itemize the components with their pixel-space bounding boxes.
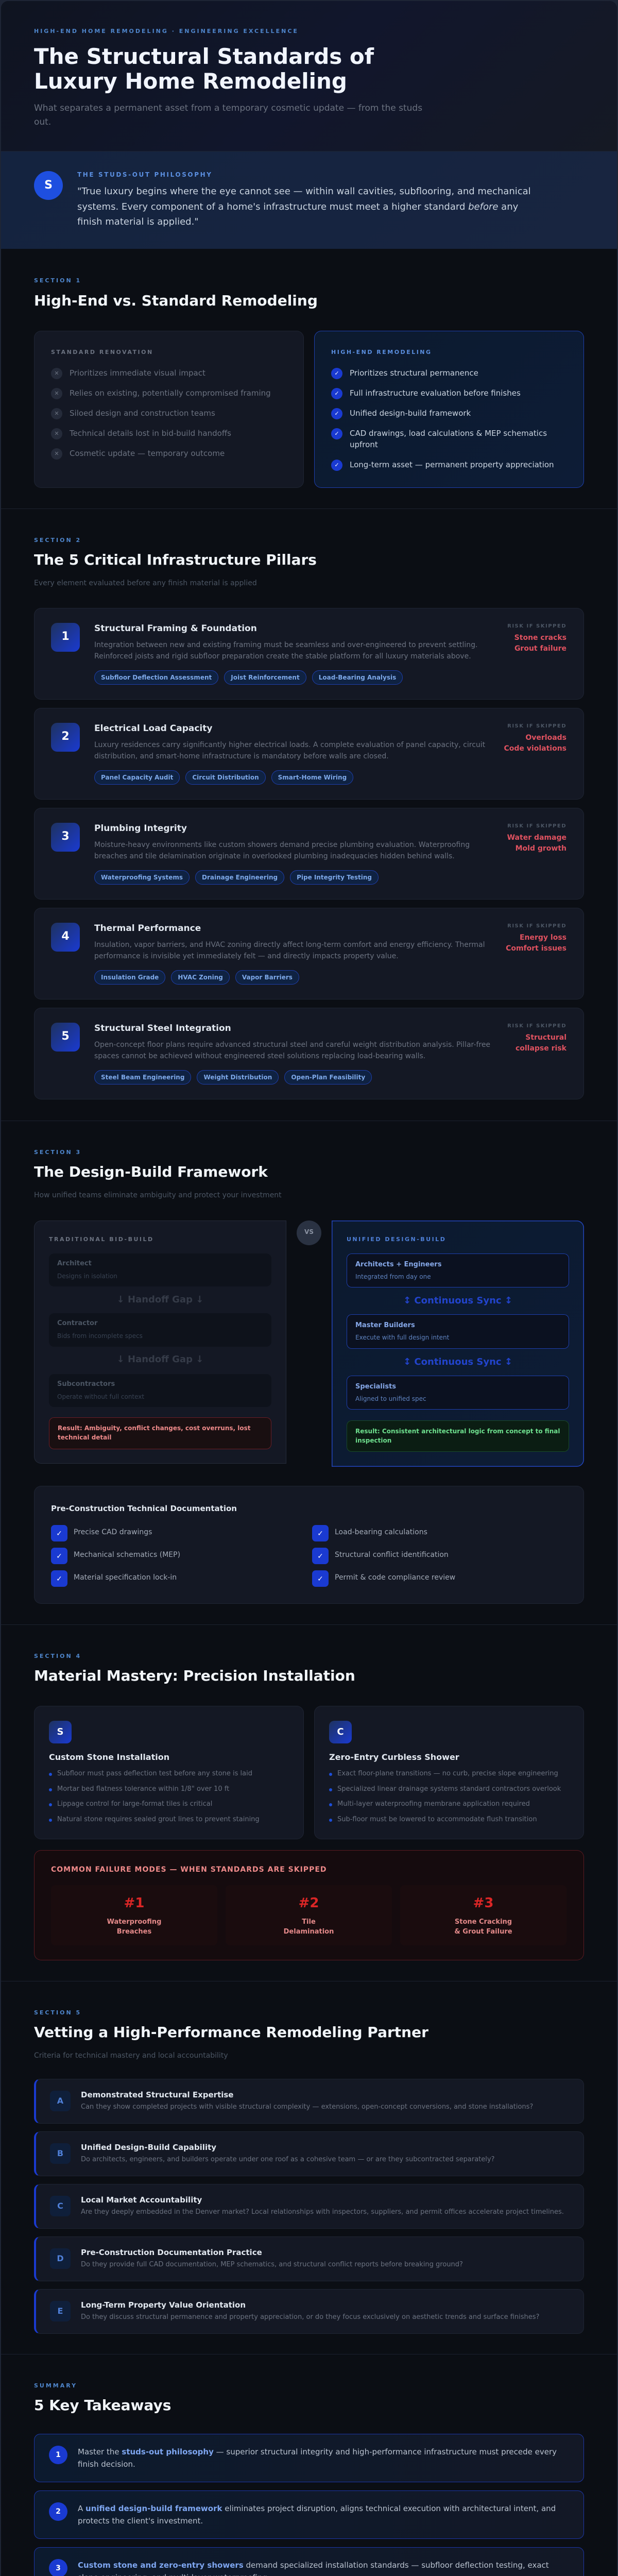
tags: Subfloor Deflection Assessment	[101, 674, 212, 681]
item: ✓	[56, 1530, 62, 1538]
section: summary takeaways	[1, 2354, 617, 2576]
risk values: Stone cracks	[514, 634, 566, 642]
tags: Load-Bearing Analysis	[319, 674, 396, 681]
pillar title: Plumbing Integrity	[94, 823, 187, 834]
badge: vs: VS	[304, 1228, 314, 1235]
letter badge	[50, 2091, 71, 2111]
risk values: Water damage	[507, 834, 566, 842]
tags	[94, 670, 403, 685]
criterion title: Long-Term Property Value Orientation	[81, 2300, 246, 2309]
panel: pre-construction documentation	[34, 1486, 584, 1604]
pillar description: spaces cannot be achieved without engineered steel solutions replacing load-bearing walls.	[94, 1052, 425, 1060]
step: specialists	[347, 1376, 569, 1410]
item: ✕	[54, 430, 59, 437]
tags: Panel Capacity Audit	[101, 774, 173, 781]
number	[49, 2502, 67, 2521]
hero title: The Structural Standards of	[34, 44, 374, 69]
risk values	[504, 734, 566, 752]
bullet text: Natural stone requires sealed grout lines to prevent staining	[57, 1816, 260, 1823]
bullet	[329, 1803, 332, 1806]
letter badge: A	[57, 2096, 63, 2105]
criterion question: Do they discuss structural permanence and property appreciation, or do they focus exclusively on aesthetic trends and surface finishes?	[81, 2313, 539, 2320]
panel heading: HIGH-END REMODELING	[331, 348, 432, 355]
takeaway 2	[34, 2490, 584, 2539]
panel heading: COMMON FAILURE MODES — WHEN STANDARDS ARE SKIPPED	[51, 1866, 327, 1874]
tags: Open-Plan Feasibility	[291, 1074, 365, 1081]
item: ✓	[334, 430, 339, 437]
step title: Master Builders	[355, 1321, 415, 1329]
result: success: Result: Consistent architectural logic from concept to final inspection	[355, 1428, 560, 1444]
takeaway text	[78, 2445, 557, 2470]
item: Full infrastructure evaluation before finishes	[350, 388, 521, 398]
risk values: Comfort issues	[506, 944, 566, 952]
callout quote: systems. Every component of a home's infrastructure must meet a higher standard before any	[77, 201, 518, 212]
item: ✓	[56, 1552, 62, 1561]
arrow: continuous sync: ↕ Continuous Sync ↕	[403, 1295, 512, 1306]
item	[331, 428, 547, 449]
pillar description: breaches and tile delamination originate in overlooked plumbing inadequacies hidden behind walls.	[94, 852, 455, 860]
step: contractor	[49, 1313, 271, 1347]
bullet text: Mortar bed flatness tolerance within 1/8" over 10 ft	[57, 1785, 229, 1793]
item: Load-bearing calculations	[335, 1528, 427, 1536]
item: upfront	[350, 440, 378, 449]
pillar description: Insulation, vapor barriers, and HVAC zoning directly affect long-term comfort and energy efficiency. Thermal	[94, 941, 485, 949]
number badge: 3	[61, 830, 70, 843]
step title: Architect	[57, 1260, 92, 1267]
list: standard items	[51, 368, 271, 460]
letter badge: C	[57, 2201, 63, 2210]
bullet	[49, 1819, 52, 1822]
icon: S circle	[34, 171, 63, 200]
panel: traditional bid-build	[34, 1221, 286, 1464]
tags: Smart-Home Wiring	[278, 774, 347, 781]
section heading: 5 Key Takeaways	[34, 2397, 171, 2414]
section label: SECTION 1	[34, 277, 81, 283]
step note: Aligned to unified spec	[355, 1395, 426, 1402]
bullet	[329, 1773, 332, 1776]
pillar description: performance is invisible yet immediately felt — and directly impacts property value.	[94, 952, 399, 960]
result: failure: Result: Ambiguity, conflict changes, cost overruns, lost technical detail	[58, 1425, 250, 1441]
risk values: collapse risk	[516, 1044, 566, 1052]
item: ✕	[54, 390, 59, 397]
panel: high-end remodeling	[314, 331, 584, 488]
tags: Weight Distribution	[203, 1074, 272, 1081]
failure label: Breaches	[117, 1928, 151, 1936]
callout quote: "True luxury begins where the eye cannot see — within wall cavities, subflooring, and mechanical	[77, 186, 531, 197]
hero eyebrow: HIGH-END HOME REMODELING · ENGINEERING EXCELLENCE	[34, 28, 299, 35]
pillar description	[94, 641, 478, 660]
failure label: Tile	[302, 1918, 316, 1926]
number badge	[51, 823, 80, 852]
takeaway text: Master the studs-out philosophy — superior structural integrity and high-performance infrastructure must precede every	[78, 2447, 557, 2456]
panel: zero-entry curbless shower	[314, 1706, 584, 1839]
panel: common failure modes	[34, 1850, 584, 1960]
letter badge: D	[57, 2253, 64, 2263]
section label: SECTION 2	[34, 537, 81, 543]
risk label: RISK IF SKIPPED	[507, 823, 566, 829]
step: architect	[49, 1253, 271, 1286]
risk values	[506, 934, 566, 952]
number: 3	[56, 2564, 61, 2572]
tags	[94, 870, 379, 885]
callout quote: finish material is applied."	[77, 216, 199, 227]
item: ✕	[54, 370, 59, 377]
takeaway text: finish decision.	[78, 2460, 135, 2469]
bullet text: Exact floor-plane transitions — no curb, precise slope engineering	[337, 1770, 558, 1777]
number: 1	[56, 2451, 61, 2459]
section label: SECTION 5	[34, 2009, 81, 2015]
item: Siloed design and construction teams	[70, 408, 215, 417]
section label: SUMMARY	[34, 2382, 77, 2388]
number	[49, 2559, 67, 2576]
takeaway 1	[34, 2434, 584, 2482]
letter badge: E	[58, 2306, 63, 2315]
item: ✕	[54, 410, 59, 417]
pillar 2	[34, 708, 584, 800]
rank: #2	[299, 1895, 319, 1911]
pillar title: Structural Framing & Foundation	[94, 623, 257, 634]
pillar 1	[34, 608, 584, 700]
pillar description	[94, 841, 470, 860]
hero subtitle: What separates a permanent asset from a temporary cosmetic update — from the studs	[34, 103, 422, 113]
callout: studs-out philosophy	[1, 151, 617, 249]
panel: standard renovation	[34, 331, 304, 488]
callout quote	[77, 186, 531, 227]
failure label: Stone Cracking	[455, 1918, 512, 1926]
arrow: handoff gap: ↓ Handoff Gap ↓	[117, 1294, 203, 1305]
risk values	[516, 1033, 566, 1052]
panel: unified design-build	[332, 1221, 584, 1467]
arrow: continuous sync: ↕ Continuous Sync ↕	[403, 1357, 512, 1367]
pillar 3	[34, 808, 584, 900]
pillar 5	[34, 1008, 584, 1099]
panel title: Zero-Entry Curbless Shower	[329, 1752, 459, 1762]
step title: Specialists	[355, 1383, 396, 1391]
tags: Joist Reinforcement	[231, 674, 300, 681]
result: failure	[49, 1417, 271, 1449]
section heading: The Design-Build Framework	[34, 1163, 268, 1180]
pillar description: distribution, and smart-home infrastructure is mandatory before walls are closed.	[94, 752, 389, 760]
icon badge	[49, 1721, 72, 1743]
item: ✓	[334, 390, 339, 397]
step: master builders	[347, 1314, 569, 1349]
risk label: RISK IF SKIPPED	[507, 1023, 566, 1029]
step note: Designs in isolation	[57, 1273, 117, 1280]
failure label: Waterproofing	[107, 1918, 161, 1926]
section label: SECTION 3	[34, 1149, 81, 1155]
pillar description	[94, 741, 485, 760]
section 3: design-build framework	[1, 1121, 617, 1624]
item: Precise CAD drawings	[74, 1528, 152, 1536]
criterion question: Are they deeply embedded in the Denver market? Local relationships with inspectors, suppliers, and permit offices accelerate project timelines.	[81, 2208, 564, 2215]
item: ✓	[317, 1530, 323, 1538]
risk values: Overloads	[525, 734, 566, 742]
section subheading: Every element evaluated before any finish material is applied	[34, 579, 257, 587]
risk label: RISK IF SKIPPED	[507, 723, 566, 729]
criterion D	[34, 2236, 584, 2281]
bullet	[49, 1803, 52, 1806]
tags	[94, 1070, 372, 1084]
criterion title: Pre-Construction Documentation Practice	[81, 2247, 262, 2257]
pillar description: Moisture-heavy environments like custom showers demand precise plumbing evaluation. Waterproofing	[94, 841, 470, 849]
icon badge: S	[57, 1726, 63, 1737]
step title: Architects + Engineers	[355, 1261, 441, 1268]
risk values: Mold growth	[516, 844, 566, 852]
pillar description	[94, 941, 485, 960]
tags: Circuit Distribution	[192, 774, 259, 781]
criterion title: Demonstrated Structural Expertise	[81, 2090, 233, 2099]
item: Long-term asset — permanent property appreciation	[350, 460, 554, 469]
tags: Steel Beam Engineering	[101, 1074, 184, 1081]
item	[312, 1525, 427, 1541]
item: Technical details lost in bid-build handoffs	[70, 429, 231, 438]
risk label: RISK IF SKIPPED	[507, 623, 566, 629]
section subheading: How unified teams eliminate ambiguity and protect your investment	[34, 1191, 282, 1199]
risk values	[507, 834, 566, 852]
hero title: Luxury Home Remodeling	[34, 69, 347, 94]
number badge	[51, 923, 80, 952]
section 4: material mastery	[1, 1624, 617, 1981]
number badge	[51, 1023, 80, 1052]
risk values: Grout failure	[514, 644, 566, 652]
item: Material specification lock-in	[74, 1573, 177, 1582]
item: ✓	[56, 1575, 62, 1583]
item	[51, 1548, 180, 1564]
criterion A	[34, 2078, 584, 2124]
number badge: 5	[61, 1030, 70, 1043]
bullet text: Subfloor must pass deflection test before any stone is laid	[57, 1770, 252, 1777]
failure mode 2	[226, 1885, 392, 1945]
item: ✓	[334, 370, 339, 377]
number badge: 2	[61, 730, 70, 743]
number badge	[51, 723, 80, 752]
hero subtitle: out.	[34, 117, 51, 127]
pillar title: Thermal Performance	[94, 923, 201, 934]
tags: Vapor Barriers	[242, 974, 293, 981]
criterion E	[34, 2289, 584, 2334]
step note: Bids from incomplete specs	[57, 1332, 143, 1340]
criterion C	[34, 2183, 584, 2229]
step note: Integrated from day one	[355, 1273, 431, 1280]
bullet text: Lippage control for large-format tiles is critical	[57, 1800, 212, 1808]
panel: custom stone installation	[34, 1706, 304, 1839]
number: 2	[56, 2507, 61, 2516]
item: Cosmetic update — temporary outcome	[70, 448, 225, 457]
rank: #3	[473, 1895, 493, 1911]
bullet text: Specialized linear drainage systems standard contractors overlook	[337, 1785, 561, 1793]
step note: Execute with full design intent	[355, 1334, 449, 1341]
hero subtitle	[34, 103, 422, 127]
icon badge: C	[337, 1726, 344, 1737]
bullet	[329, 1788, 332, 1791]
takeaway text	[78, 2502, 556, 2527]
item: Relies on existing, potentially compromised framing	[70, 388, 271, 398]
step: subcontractors	[49, 1374, 271, 1406]
failure label	[284, 1918, 334, 1936]
item: Prioritizes immediate visual impact	[70, 368, 205, 377]
panel heading: Pre-Construction Technical Documentation	[51, 1503, 237, 1513]
risk values: Energy loss	[520, 934, 566, 942]
takeaway text: A unified design-build framework eliminates project disruption, aligns technical execution with architectural intent, and	[78, 2504, 556, 2513]
section heading: The 5 Critical Infrastructure Pillars	[34, 551, 317, 568]
item: ✓	[317, 1575, 323, 1583]
item: CAD drawings, load calculations & MEP schematics	[350, 429, 547, 438]
bullet	[329, 1819, 332, 1822]
item	[312, 1548, 449, 1564]
pillar title: Structural Steel Integration	[94, 1023, 231, 1033]
panel heading: UNIFIED DESIGN-BUILD	[347, 1236, 446, 1243]
section label: SECTION 4	[34, 1653, 81, 1659]
bullet text: Multi-layer waterproofing membrane application required	[337, 1800, 530, 1808]
icon badge	[329, 1721, 352, 1743]
failure label: Delamination	[284, 1928, 334, 1936]
pillar description: Open-concept floor plans require advanced structural steel and careful weight distribution analysis. Pillar-free	[94, 1041, 490, 1049]
section 5: vetting a partner	[1, 1981, 617, 2354]
hero header	[1, 1, 617, 151]
tags: HVAC Zoning	[178, 974, 223, 981]
pillar description	[94, 1041, 490, 1060]
tags	[94, 970, 299, 985]
item: Prioritizes structural permanence	[350, 368, 478, 377]
item: ✕	[54, 450, 59, 457]
step title: Subcontractors	[57, 1380, 115, 1388]
tags: Pipe Integrity Testing	[297, 874, 372, 881]
panel heading: STANDARD RENOVATION	[51, 348, 153, 355]
pillar description: Integration between new and existing framing must be seamless and over-engineered to prevent settling.	[94, 641, 478, 649]
tags: Insulation Grade	[101, 974, 159, 981]
criterion B	[34, 2131, 584, 2176]
step note: Operate without full context	[57, 1393, 144, 1400]
number badge	[51, 623, 80, 652]
letter badge	[50, 2143, 71, 2164]
bullet	[49, 1773, 52, 1776]
panel title: Custom Stone Installation	[49, 1752, 169, 1762]
takeaway text	[78, 2558, 549, 2576]
number badge: 4	[61, 930, 70, 943]
item: Permit & code compliance review	[335, 1573, 455, 1582]
risk values: Structural	[525, 1033, 566, 1042]
item	[51, 1570, 177, 1587]
pillar description: Reinforced joists and rigid subfloor preparation create the stable platform for all luxury materials above.	[94, 652, 471, 660]
number	[49, 2446, 67, 2464]
item: Unified design-build framework	[350, 408, 471, 417]
step: architects + engineers	[347, 1253, 569, 1287]
risk label: RISK IF SKIPPED	[507, 923, 566, 929]
hero title	[34, 44, 374, 94]
badge: vs	[297, 1221, 321, 1245]
takeaway text: protects the client's investment.	[78, 2516, 203, 2526]
icon: S circle: S	[44, 179, 53, 192]
failure mode 1	[51, 1885, 217, 1945]
pillar description: Luxury residences carry significantly higher electrical loads. A complete evaluation of panel capacity, circuit	[94, 741, 485, 749]
pillar 4	[34, 908, 584, 999]
risk values	[514, 634, 566, 652]
criterion question: Do architects, engineers, and builders operate under one roof as a cohesive team — or are they subcontracted separately?	[81, 2156, 494, 2163]
step title: Contractor	[57, 1319, 97, 1327]
criterion title: Unified Design-Build Capability	[81, 2142, 216, 2151]
bullet text: Sub-floor must be lowered to accommodate flush transition	[337, 1816, 537, 1823]
item	[312, 1570, 455, 1587]
arrow: handoff gap: ↓ Handoff Gap ↓	[117, 1354, 203, 1365]
section heading: High-End vs. Standard Remodeling	[34, 292, 318, 309]
failure label	[454, 1918, 512, 1936]
tags: Waterproofing Systems	[101, 874, 183, 881]
callout label: THE STUDS-OUT PHILOSOPHY	[77, 171, 213, 178]
letter badge	[50, 2248, 71, 2269]
failure label: & Grout Failure	[454, 1928, 512, 1936]
result: success	[347, 1420, 569, 1452]
number badge: 1	[61, 630, 70, 643]
section heading: Material Mastery: Precision Installation	[34, 1667, 355, 1684]
item	[51, 1525, 152, 1541]
item: Structural conflict identification	[335, 1551, 449, 1559]
rank: #1	[124, 1895, 144, 1911]
failure label	[107, 1918, 161, 1936]
criterion title: Local Market Accountability	[81, 2195, 202, 2204]
takeaway text: Custom stone and zero-entry showers demand specialized installation standards — subfloor deflection testing, exact	[78, 2561, 549, 2570]
takeaway 3	[34, 2547, 584, 2576]
section subheading: Criteria for technical mastery and local accountability	[34, 2052, 228, 2060]
pillar title: Electrical Load Capacity	[94, 723, 212, 734]
risk values: Code violations	[504, 744, 566, 752]
tags: Drainage Engineering	[202, 874, 278, 881]
list: high-end items	[331, 368, 554, 471]
section heading: Vetting a High-Performance Remodeling Partner	[34, 2024, 428, 2041]
bullet	[49, 1788, 52, 1791]
item: ✓	[334, 410, 339, 417]
section 1: high-end vs standard	[34, 277, 584, 488]
item: ✓	[334, 462, 339, 468]
item: Mechanical schematics (MEP)	[74, 1551, 180, 1559]
section 2: infrastructure pillars	[1, 509, 617, 1121]
panel heading: TRADITIONAL BID-BUILD	[49, 1236, 154, 1243]
item: ✓	[317, 1552, 323, 1561]
letter badge: B	[57, 2148, 63, 2158]
failure mode 3	[400, 1885, 566, 1945]
criterion question: Can they show completed projects with visible structural complexity — extensions, open-concept conversions, and stone installations?	[81, 2103, 533, 2110]
criterion question: Do they provide full CAD documentation, MEP schematics, and structural conflict reports before breaking ground?	[81, 2261, 463, 2268]
letter badge	[50, 2196, 71, 2216]
tags	[94, 770, 353, 785]
letter badge	[50, 2301, 71, 2321]
